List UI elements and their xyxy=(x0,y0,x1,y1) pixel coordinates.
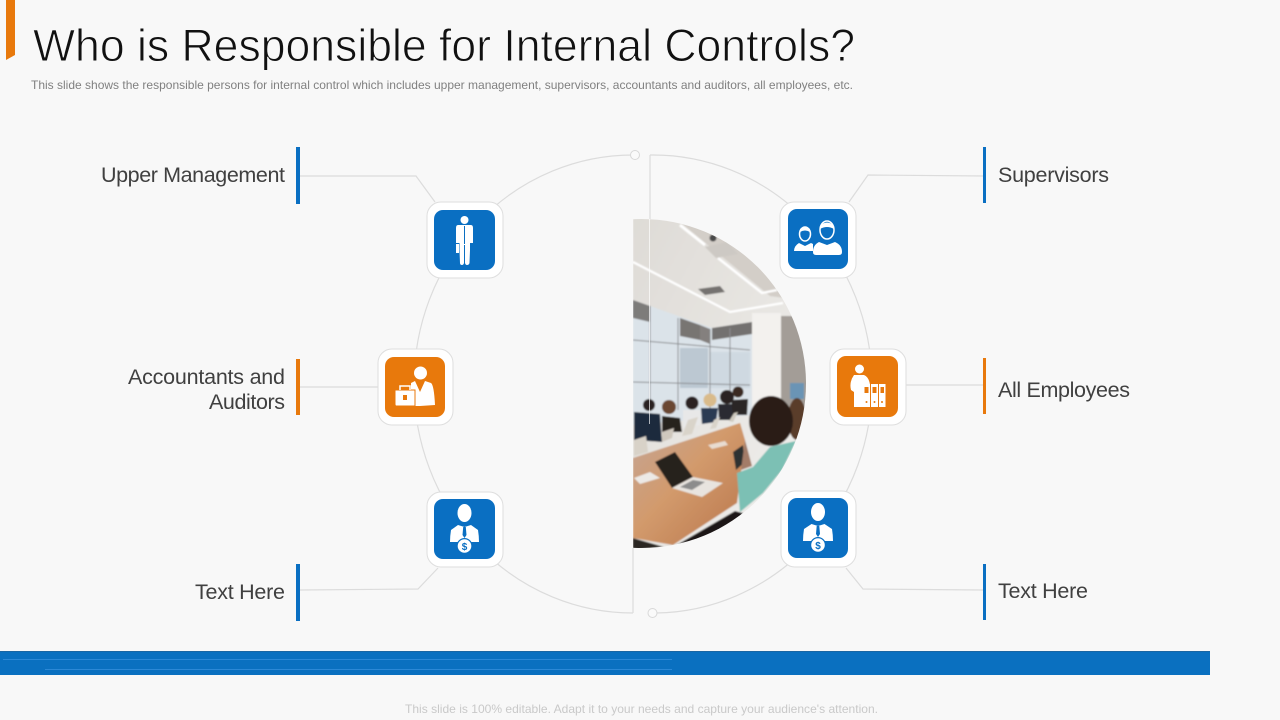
icon tile: standing man xyxy=(427,202,503,278)
label bar xyxy=(983,358,986,414)
label: Supervisors xyxy=(998,163,1109,187)
label: Text Here xyxy=(998,579,1088,603)
ring node bottom xyxy=(648,608,657,618)
item: All Employees xyxy=(830,349,1130,425)
label: Auditors xyxy=(209,390,285,414)
footer note: This slide is 100% editable. Adapt it to your needs and capture your audience's attention. xyxy=(405,702,878,716)
item: Text Here (right) xyxy=(781,491,1088,620)
icon tile: businessman with briefcase xyxy=(378,349,453,425)
label: All Employees xyxy=(998,378,1130,402)
item: Accountants and Auditors xyxy=(128,349,453,425)
title: Who is Responsible for Internal Controls? xyxy=(33,20,855,71)
label bar xyxy=(983,564,986,620)
label bar xyxy=(296,359,300,415)
label: Accountants and xyxy=(128,365,285,389)
icon tile: employee with files xyxy=(830,349,906,425)
label: Text Here xyxy=(195,580,285,604)
ring node top xyxy=(630,150,640,160)
icon tile: man with dollar xyxy=(427,492,503,567)
label bar xyxy=(296,147,300,204)
photo divider highlight xyxy=(648,219,650,424)
item: Text Here (left) xyxy=(195,492,503,621)
connector lines xyxy=(300,175,985,590)
photo: meeting room half circle xyxy=(633,218,808,552)
orange accent tab xyxy=(6,0,15,60)
item: Supervisors xyxy=(780,147,1109,278)
diagram ring: arcs and dividers xyxy=(414,155,872,613)
icon tile: man with dollar xyxy=(781,491,856,567)
label: Upper Management xyxy=(101,163,285,187)
icon tile: two supervisors xyxy=(780,202,856,278)
bottom blue band xyxy=(0,651,1210,675)
item: Upper Management xyxy=(101,147,503,278)
subtitle: This slide shows the responsible persons for internal control which includes upper management, supervisors, accountants and auditors, all employees, etc. xyxy=(31,78,853,92)
icon tile: man with dollar: $ xyxy=(462,542,468,553)
label bar xyxy=(983,147,986,203)
label bar xyxy=(296,564,300,621)
icon tile: man with dollar: $ xyxy=(815,541,821,552)
